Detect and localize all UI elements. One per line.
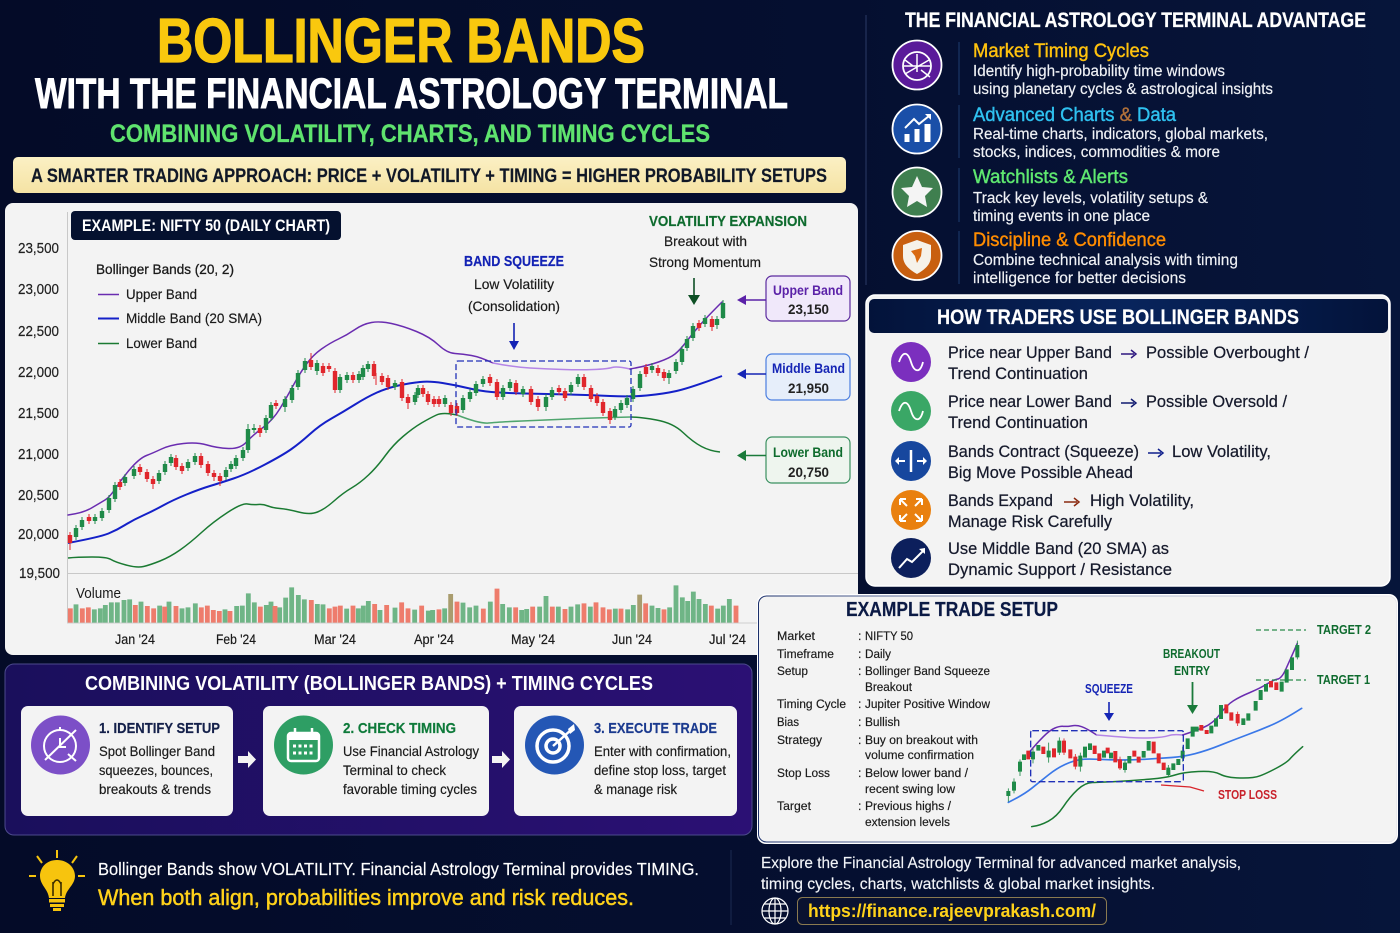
volume bars bbox=[70, 585, 736, 623]
title bbox=[35, 7, 788, 148]
row: upper band: Possible Overbought / bbox=[1146, 344, 1309, 362]
trade details table: extension levels bbox=[865, 815, 950, 829]
x axis months: Jun '24 bbox=[612, 632, 652, 647]
step 2 card: Terminal to check bbox=[343, 762, 447, 778]
trade details table: : bbox=[858, 799, 861, 813]
breakout entry label bbox=[1163, 647, 1220, 714]
row: squeeze bbox=[891, 441, 1271, 482]
feature: advanced charts and data: Real-time charts, indicators, global markets, bbox=[973, 126, 1268, 143]
row: lower band: Trend Continuation bbox=[948, 414, 1088, 432]
squeeze label: SQUEEZE bbox=[1085, 682, 1133, 696]
step 3 card: define stop loss, target bbox=[594, 762, 726, 778]
step 1 card: 1. IDENTIFY SETUP bbox=[99, 720, 220, 737]
trade details table: Strategy bbox=[777, 733, 823, 747]
volatility expansion annotation: Breakout with bbox=[664, 233, 747, 249]
mini breakout chart bbox=[1008, 623, 1371, 827]
row: expand: Bands Expand bbox=[948, 492, 1053, 510]
feature: market timing cycles: Market Timing Cycles bbox=[973, 41, 1149, 62]
panel header: HOW TRADERS USE BOLLINGER BANDS bbox=[937, 306, 1299, 329]
trade details table: Below lower band / bbox=[865, 766, 969, 780]
icon: target bbox=[525, 716, 584, 774]
trade details table: : bbox=[858, 697, 861, 711]
feature: market timing cycles: using planetary cycles & astrological insights bbox=[973, 81, 1273, 98]
stop loss: STOP LOSS bbox=[1218, 788, 1277, 802]
call to action text: timing cycles, charts, watchlists & global market insights. bbox=[761, 876, 1155, 893]
x axis months bbox=[115, 632, 746, 647]
y axis labels bbox=[18, 241, 60, 582]
y axis labels: 23,500 bbox=[18, 241, 59, 257]
trade details table: NIFTY 50 bbox=[865, 629, 913, 643]
trade details table: Previous highs / bbox=[865, 799, 952, 813]
band squeeze annotation: BAND SQUEEZE bbox=[464, 253, 564, 270]
legend: Upper Band bbox=[126, 286, 197, 302]
panel: example trade setup bbox=[757, 594, 1398, 844]
step 1 card: Spot Bollinger Band bbox=[99, 743, 215, 759]
call to action text: Explore the Financial Astrology Terminal for advanced market analysis, bbox=[761, 855, 1241, 872]
icon: shield bbox=[892, 231, 942, 280]
trade details table: : bbox=[858, 733, 861, 747]
callout: upper band: 23,150 bbox=[788, 301, 829, 317]
row: expand bbox=[891, 490, 1194, 531]
volatility expansion annotation: VOLATILITY EXPANSION bbox=[649, 213, 807, 230]
row: middle band: Dynamic Support / Resistance bbox=[948, 561, 1172, 579]
trade details table: Jupiter Positive Window bbox=[865, 697, 990, 711]
x axis months: May '24 bbox=[511, 632, 555, 647]
row: middle band: Use Middle Band (20 SMA) as bbox=[948, 540, 1169, 558]
trade details table: Timeframe bbox=[777, 647, 834, 661]
band squeeze annotation: Low Volatility bbox=[474, 276, 554, 292]
legend: Bollinger Bands (20, 2) bbox=[96, 261, 234, 277]
volatility expansion annotation: Strong Momentum bbox=[649, 254, 761, 270]
callout: lower band bbox=[737, 437, 850, 483]
y axis labels: 19,500 bbox=[19, 566, 60, 582]
panel heading: COMBINING VOLATILITY (BOLLINGER BANDS) + TIMING CYCLES bbox=[85, 673, 653, 695]
subtitle: WITH THE FINANCIAL ASTROLOGY TERMINAL bbox=[35, 70, 788, 118]
takeaway text bbox=[98, 859, 699, 910]
feature: advanced charts and data: stocks, indices, commodities & more bbox=[973, 144, 1220, 161]
y axis labels: 23,000 bbox=[18, 282, 59, 298]
callout: middle band: Middle Band bbox=[772, 360, 845, 376]
row: upper band: Trend Continuation bbox=[948, 365, 1088, 383]
middle band line bbox=[68, 376, 722, 543]
icon: calendar bbox=[274, 716, 333, 774]
row: expand: Manage Risk Carefully bbox=[948, 513, 1113, 531]
row: lower band: Price near Lower Band bbox=[948, 393, 1112, 411]
panel: how traders use bollinger bands bbox=[866, 295, 1390, 586]
callout: middle band: 21,950 bbox=[788, 380, 829, 396]
volume bars: Volume bbox=[76, 586, 121, 602]
target 2 bbox=[1256, 623, 1371, 637]
trade details table: recent swing low bbox=[865, 782, 955, 796]
icon: star bbox=[892, 168, 942, 216]
trade details table: Bullish bbox=[865, 715, 900, 729]
target 2: TARGET 2 bbox=[1317, 623, 1371, 637]
row: middle band bbox=[891, 538, 1172, 579]
legend: Lower Band bbox=[126, 335, 197, 351]
feature: discipline and confidence: Discipline & Confidence bbox=[973, 230, 1166, 251]
x axis months: Feb '24 bbox=[216, 632, 256, 647]
step 3 card: & manage risk bbox=[594, 781, 678, 797]
chart tag: EXAMPLE: NIFTY 50 (DAILY CHART) bbox=[82, 216, 330, 235]
row: upper band: Price near Upper Band bbox=[948, 344, 1112, 362]
trade details table: : bbox=[858, 629, 861, 643]
arrow 2 to 3 bbox=[492, 751, 510, 768]
icon: globe bbox=[762, 898, 788, 924]
feature: market timing cycles bbox=[892, 40, 1273, 98]
candlesticks bbox=[70, 300, 723, 550]
trade details table: : bbox=[858, 766, 861, 780]
x axis months: Jan '24 bbox=[115, 632, 155, 647]
trade details table: : bbox=[858, 715, 861, 729]
stop loss bbox=[1161, 785, 1277, 802]
callout: upper band: Upper Band bbox=[773, 282, 843, 298]
target 1 bbox=[1256, 673, 1370, 687]
feature: watchlists and alerts: Watchlists & Alerts bbox=[973, 167, 1128, 188]
x axis months: Jul '24 bbox=[709, 632, 746, 647]
step 2 card: Use Financial Astrology bbox=[343, 743, 479, 759]
icon: clock wheel bbox=[892, 40, 942, 90]
step 1 card: breakouts & trends bbox=[99, 781, 211, 797]
step 3 card: 3. EXECUTE TRADE bbox=[594, 720, 717, 737]
panel: main Nifty 50 chart bbox=[5, 203, 858, 655]
trade details table: Buy on breakout with bbox=[865, 733, 978, 747]
feature: discipline and confidence: intelligence for better decisions bbox=[973, 270, 1186, 287]
icon: light bulb bbox=[29, 850, 85, 911]
trade details table: Bias bbox=[777, 715, 799, 729]
trade details table: Market bbox=[777, 629, 816, 643]
upper band line bbox=[68, 302, 722, 515]
band squeeze annotation bbox=[464, 253, 564, 350]
feature: discipline and confidence bbox=[892, 230, 1238, 287]
feature: advanced charts and data: Advanced Charts & Data bbox=[973, 105, 1176, 126]
callout: lower band: Lower Band bbox=[773, 444, 843, 460]
step 1 card: squeezes, bounces, bbox=[99, 762, 213, 778]
y axis labels: 20,000 bbox=[18, 527, 59, 543]
banner: smarter trading approach bbox=[13, 157, 846, 193]
row: upper band bbox=[891, 342, 1309, 383]
trade details table: Breakout bbox=[865, 680, 913, 694]
tagline: COMBINING VOLATILITY, CHARTS, AND TIMING CYCLES bbox=[110, 120, 710, 148]
x axis months: Mar '24 bbox=[314, 632, 356, 647]
website link: https://finance.rajeevprakash.com/ bbox=[808, 901, 1096, 921]
title: BOLLINGER BANDS bbox=[157, 7, 645, 76]
trade details table: : bbox=[858, 647, 861, 661]
trade details table: : bbox=[858, 664, 861, 678]
step 2 card bbox=[263, 706, 489, 816]
legend bbox=[96, 261, 262, 351]
row: squeeze: Low Volatility, bbox=[1172, 443, 1271, 461]
trade details table: Target bbox=[777, 799, 812, 813]
squeeze box bbox=[456, 361, 631, 427]
y axis labels: 22,500 bbox=[18, 324, 59, 340]
feature: market timing cycles: Identify high-probability time windows bbox=[973, 63, 1225, 80]
step 3 card bbox=[514, 706, 737, 816]
chart tag bbox=[71, 211, 341, 240]
callout: upper band bbox=[737, 276, 850, 321]
arrow 1 to 2 bbox=[238, 751, 256, 768]
row: lower band bbox=[891, 391, 1287, 432]
panel header bbox=[869, 299, 1388, 333]
step 3 card: Enter with confirmation, bbox=[594, 743, 731, 759]
trade details table: Setup bbox=[777, 664, 808, 678]
feature: discipline and confidence: Combine technical analysis with timing bbox=[973, 252, 1238, 269]
takeaway text: When both align, probabilities improve and risk reduces. bbox=[98, 885, 634, 910]
breakout entry label: BREAKOUT bbox=[1163, 647, 1220, 661]
y axis labels: 20,500 bbox=[18, 488, 59, 504]
trade details table: Bollinger Band Squeeze bbox=[865, 664, 990, 678]
lower band line bbox=[68, 414, 720, 567]
legend: Middle Band (20 SMA) bbox=[126, 310, 262, 326]
panel: combining volatility and timing bbox=[5, 664, 752, 835]
callout: middle band bbox=[737, 354, 850, 400]
trade details table: Timing Cycle bbox=[777, 697, 846, 711]
trade details table bbox=[777, 629, 990, 829]
y axis labels: 21,500 bbox=[18, 406, 59, 422]
volatility expansion annotation bbox=[649, 213, 807, 305]
feature: advanced charts and data bbox=[892, 104, 1268, 161]
trade details table: Stop Loss bbox=[777, 766, 830, 780]
y axis labels: 21,000 bbox=[18, 447, 59, 463]
target 1: TARGET 1 bbox=[1317, 673, 1370, 687]
y axis labels: 22,000 bbox=[18, 365, 59, 381]
banner: smarter trading approach: A SMARTER TRADING APPROACH: PRICE + VOLATILITY + TIMING = HIGHER PROBABILITY SETUPS bbox=[31, 166, 827, 187]
row: squeeze: Bands Contract (Squeeze) bbox=[948, 443, 1139, 461]
panel heading: EXAMPLE TRADE SETUP bbox=[846, 599, 1058, 621]
trade details table: Daily bbox=[865, 647, 892, 661]
step 1 card bbox=[21, 706, 233, 816]
row: lower band: Possible Oversold / bbox=[1146, 393, 1287, 411]
callout: lower band: 20,750 bbox=[788, 464, 829, 480]
row: expand: High Volatility, bbox=[1090, 492, 1194, 510]
step 2 card: 2. CHECK TIMING bbox=[343, 720, 456, 737]
call to action text bbox=[761, 855, 1241, 893]
squeeze label bbox=[1085, 682, 1133, 721]
takeaway text: Bollinger Bands show VOLATILITY. Financial Astrology Terminal provides TIMING. bbox=[98, 859, 699, 879]
icon: bar chart up bbox=[892, 104, 942, 154]
x axis months: Apr '24 bbox=[414, 632, 454, 647]
feature: watchlists and alerts: Track key levels, volatility setups & bbox=[973, 190, 1209, 207]
band squeeze annotation: (Consolidation) bbox=[468, 298, 560, 314]
row: squeeze: Big Move Possible Ahead bbox=[948, 464, 1133, 482]
trade details table: volume confirmation bbox=[865, 748, 974, 762]
feature: watchlists and alerts: timing events in one place bbox=[973, 208, 1150, 225]
breakout entry label: ENTRY bbox=[1174, 664, 1211, 678]
feature: watchlists and alerts bbox=[892, 167, 1209, 225]
step 2 card: favorable timing cycles bbox=[343, 781, 477, 797]
icon: clock dial bbox=[31, 716, 90, 774]
